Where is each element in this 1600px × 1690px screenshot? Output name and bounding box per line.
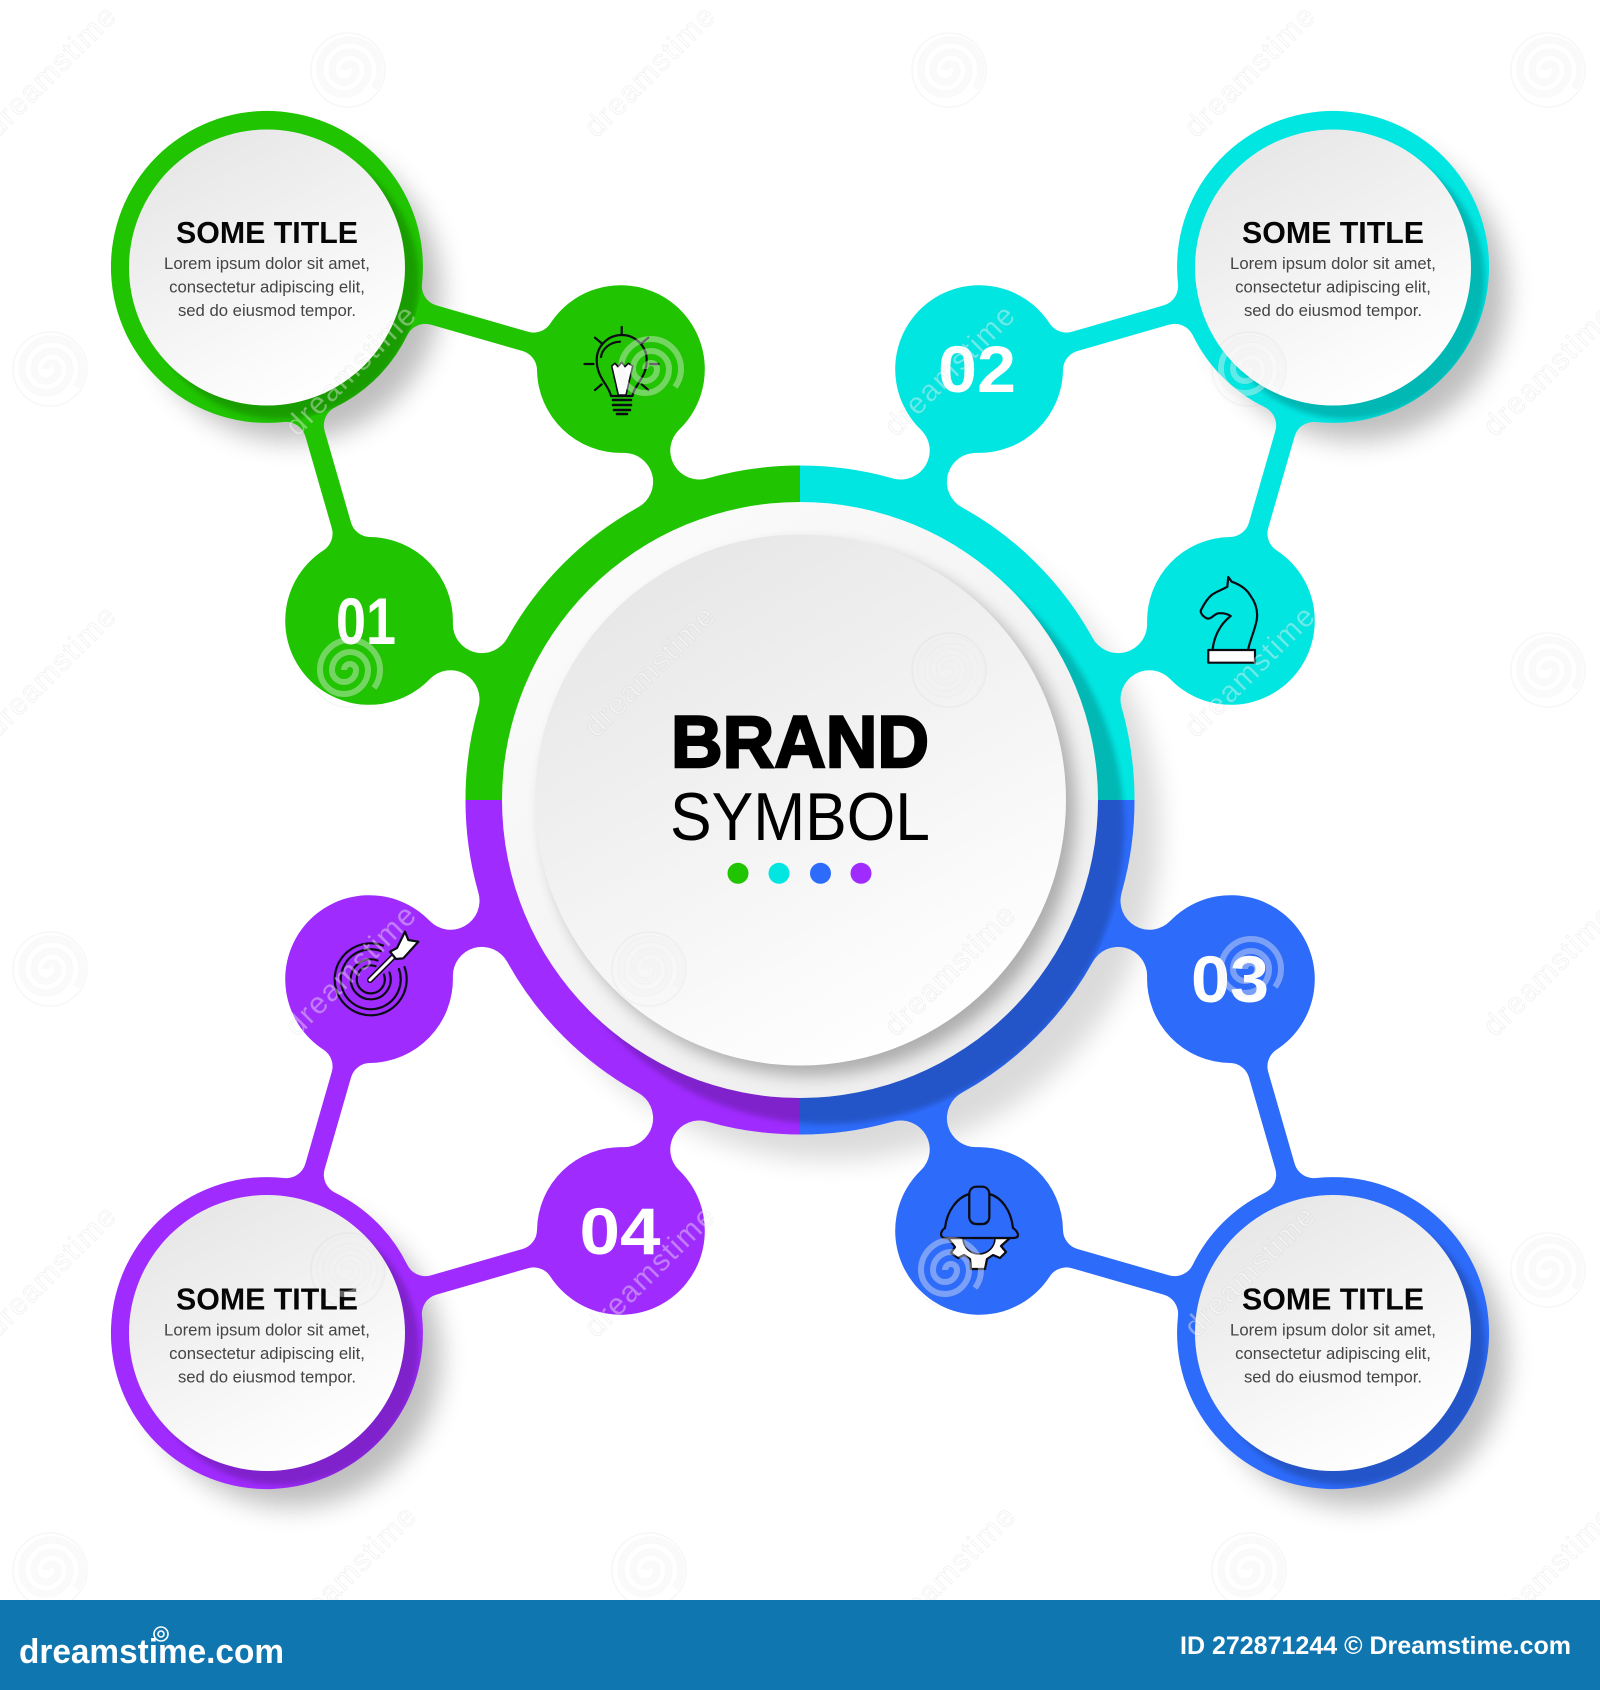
panel: top-left text circle: consectetur adipiscing elit, [169,278,365,296]
quadrant network 03: blue [800,800,1489,1489]
icon: chess knight [1201,577,1257,663]
number 01: 01 [336,584,396,658]
number 03: 03 [1191,942,1269,1016]
panel: bottom-left text circle [129,1195,419,1485]
panel: top-right text circle: SOME TITLE [1242,215,1424,250]
panel: bottom-left text circle: SOME TITLE [176,1281,358,1316]
watermark pattern: dreamstime [279,898,424,1043]
soft drop shadows on the page [141,141,1507,1507]
panel: bottom-right text circle: SOME TITLE [1242,1281,1424,1316]
panel: top-left text circle: sed do eiusmod tempor. [178,301,356,320]
watermark pattern: dreamstime [1178,599,1323,744]
panel: bottom-right text circle [1195,1195,1485,1485]
panel: top-left text circle [129,130,419,419]
panel: bottom-left text circle: Lorem ipsum dolor sit amet, [164,1320,370,1340]
panel: bottom-right text circle: consectetur adipiscing elit, [1235,1344,1431,1363]
watermark pattern: dreamstime [878,298,1023,443]
central disc [502,502,1098,1098]
panel: top-right text circle [1195,130,1485,419]
watermark pattern: dreamstime [1178,1199,1323,1344]
footer logo: dreamstime.com [19,1633,284,1671]
panel: top-right text circle: consectetur adipiscing elit, [1235,278,1431,296]
footer credit: ID 272871244 © Dreamstime.com [1180,1632,1571,1660]
watermark pattern: dreamstime [279,1499,424,1644]
watermark pattern: dreamstime [578,0,723,144]
icon: target with arrow [335,932,418,1015]
panel: top-right text circle: Lorem ipsum dolor sit amet, [1230,254,1436,273]
number 04: 04 [580,1194,661,1268]
number 02: 02 [938,332,1016,406]
icon: hard hat with gear [941,1187,1018,1269]
panel: top-left text circle: Lorem ipsum dolor sit amet, [164,254,370,273]
quadrant network 02: cyan [800,111,1489,800]
colour dots [728,863,872,884]
panel: top-left text circle: SOME TITLE [176,215,358,250]
watermark pattern: dreamstime [578,599,723,744]
brand subheading: SYMBOL [670,779,930,855]
watermark pattern: dreamstime [1178,0,1323,144]
panel: bottom-left text circle: sed do eiusmod tempor. [178,1368,356,1386]
icon: light bulb [584,327,658,414]
watermark pattern: dreamstime [878,898,1023,1043]
watermark pattern: dreamstime [578,1199,723,1344]
watermark pattern: dreamstime [878,1499,1023,1644]
quadrant network 04: purple [111,800,800,1489]
panel: top-right text circle: sed do eiusmod tempor. [1244,301,1422,320]
panel: bottom-left text circle: consectetur adipiscing elit, [169,1344,365,1363]
watermark pattern: dreamstime [279,298,424,443]
panel: bottom-right text circle: sed do eiusmod tempor. [1244,1368,1422,1386]
brand heading: BRAND [671,702,929,783]
footer logo swirl [154,1627,168,1641]
ring inner shadow [590,590,1126,1126]
footer bar [0,1600,1600,1690]
quadrant network 01: green [111,111,800,800]
panel: bottom-right text circle: Lorem ipsum dolor sit amet, [1230,1320,1436,1340]
